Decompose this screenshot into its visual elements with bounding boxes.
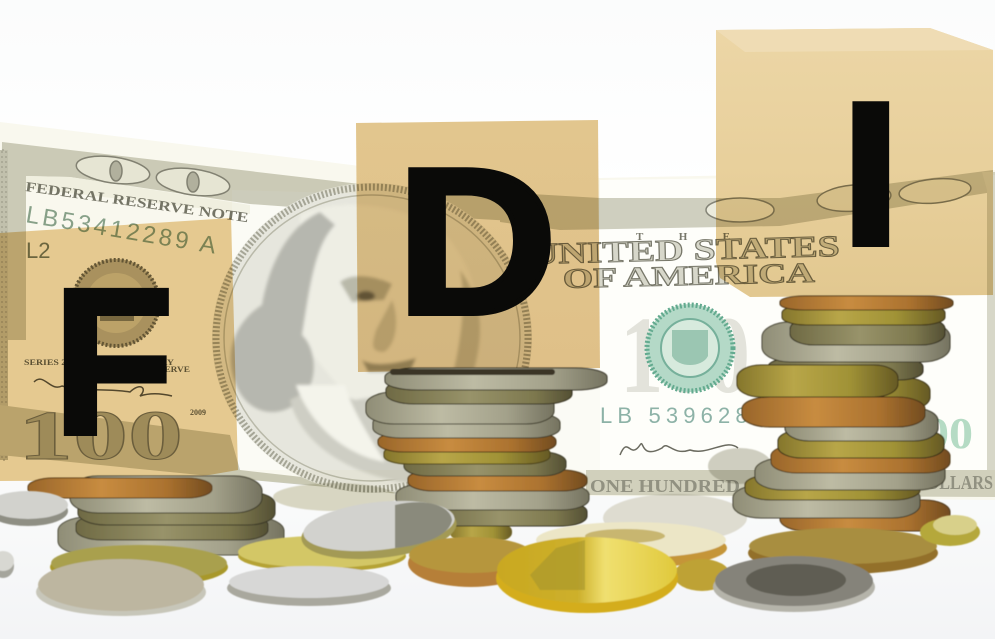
banknote heading: OF AMERICA: [562, 258, 816, 295]
wooden block D: [356, 120, 600, 372]
district code: L2: [26, 238, 50, 263]
portrait: Franklin: [231, 205, 490, 483]
coin: far left silver: [0, 491, 68, 526]
coin: dark silver front right: [713, 556, 875, 612]
coin: gold far right: [920, 515, 980, 546]
right signature: [620, 444, 738, 455]
left border band: [0, 150, 8, 460]
bottom band right: [586, 470, 995, 497]
treasury seal green: [646, 304, 734, 392]
coin: small gold rear: [674, 559, 730, 591]
top border band right: [500, 170, 995, 470]
wooden block F: [0, 218, 238, 481]
treasury note small text: SERIES 2006 A THE SECRETARY: [24, 358, 174, 367]
left signature: [34, 379, 172, 396]
coin: large bright gold: [496, 537, 678, 613]
loose coins on the table: [0, 491, 980, 616]
serial number left: LB53412289 A: [24, 201, 218, 260]
serial number right: LB 5396282: [600, 403, 765, 428]
banknote paper: [0, 122, 995, 500]
coin: silver front: [227, 566, 391, 606]
letter I: I: [840, 59, 902, 289]
coin: tan front left: [36, 559, 206, 616]
letter F: F: [53, 245, 174, 478]
coin: olive gold rear left: [50, 545, 228, 587]
top band ovals 100: [75, 152, 231, 200]
top border band left: [0, 142, 600, 340]
bottom band left with 100: [0, 398, 560, 494]
coin: white gold rear: [535, 522, 727, 568]
treasury note small text: 2009: [190, 408, 206, 417]
bottom band right: ONE HUNDRED: [590, 476, 740, 496]
coins behind the banknote edge: [273, 448, 772, 542]
pale 100 watermark: 100: [620, 294, 750, 416]
coin: left edge: [0, 551, 14, 578]
coin: copper centre: [408, 537, 534, 587]
coin stack under I: [733, 296, 953, 531]
treasury note small text: [24, 358, 206, 417]
coin: gold middle left: [238, 536, 406, 572]
portrait oval: [212, 183, 532, 493]
banknote heading: THE: [636, 231, 730, 243]
top band ovals right: [706, 176, 972, 222]
wooden block I: [716, 28, 993, 297]
treasury note small text: FEDERAL RESERVE: [100, 365, 190, 374]
coin stack under D: [366, 368, 607, 541]
coin: silver tilted: [299, 494, 459, 566]
green 100 right: 00: [925, 409, 973, 458]
banknote heading: UNITED STATES: [529, 230, 840, 271]
federal reserve text: FEDERAL RESERVE NOTE: [24, 180, 249, 226]
banknote print, blended over the blocks: [0, 142, 995, 497]
banknote heading: [529, 230, 840, 295]
coin: dark gold right: [748, 528, 938, 574]
coin stack under F: [28, 476, 284, 555]
bottom band left with 100: 100: [18, 398, 183, 475]
left seal: [72, 259, 160, 347]
letter D: D: [396, 124, 557, 358]
